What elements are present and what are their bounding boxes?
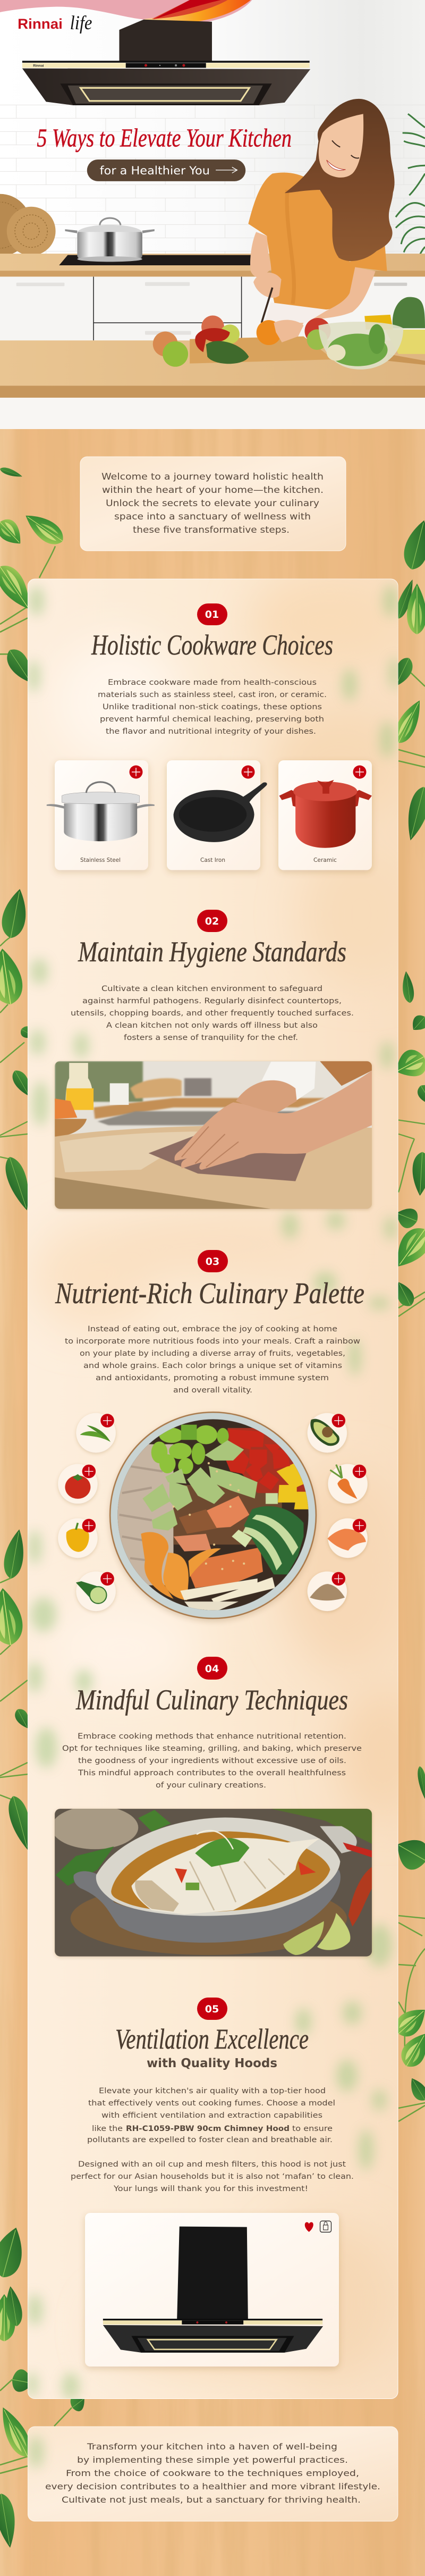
badge 05: 05 bbox=[205, 2003, 219, 2015]
icon: chimney hood bbox=[103, 2227, 323, 2353]
body 02: utensils, chopping boards, and other frequently touched surfaces. bbox=[71, 1009, 354, 1018]
icon: avocado bbox=[308, 1413, 347, 1453]
photo: steamed fish dish bbox=[52, 1806, 372, 1957]
body 05: Your lungs will thank you for this investment! bbox=[113, 2185, 308, 2193]
body 01: Unlike traditional non-stick coatings, these options bbox=[103, 703, 322, 711]
card: ceramic: Ceramic bbox=[313, 857, 337, 863]
hero: kitchen scene bbox=[0, 0, 425, 429]
title: 5 Ways to Elevate Your Kitchen bbox=[37, 123, 292, 153]
subtitle pill with arrow: for a Healthier You bbox=[100, 164, 210, 178]
body 05: Designed with an oil cup and mesh filters, this hood is not just bbox=[78, 2160, 346, 2169]
body 02: against harmful pathogens. Regularly disinfect countertops, bbox=[82, 997, 342, 1005]
body 03: Instead of eating out, embrace the joy of cooking at home bbox=[88, 1325, 337, 1333]
intro text panel: Unlock the secrets to elevate your culinary bbox=[106, 498, 319, 508]
body 02: A clean kitchen not only wards off illness but also bbox=[106, 1021, 318, 1030]
body 03: and whole grains. Each color brings a unique set of vitamins bbox=[83, 1362, 342, 1370]
badge 01: 01 bbox=[205, 609, 219, 620]
card: stainless steel bbox=[47, 760, 155, 870]
body 05: to ensure bbox=[292, 2125, 333, 2133]
body 04: of your culinary creations. bbox=[156, 1781, 266, 1790]
body 04: This mindful approach contributes to the overall healthfulness bbox=[78, 1769, 346, 1777]
card: chimney hood product bbox=[85, 2213, 339, 2367]
icon: heart bbox=[305, 2222, 313, 2232]
subheading: with Quality Hoods bbox=[147, 2057, 277, 2070]
badge 05 bbox=[197, 1998, 227, 2020]
subtitle pill with arrow bbox=[87, 160, 245, 181]
intro text panel bbox=[80, 457, 346, 551]
icon: snap peas bbox=[76, 1413, 116, 1453]
body 01: Embrace cookware made from health-conscious bbox=[108, 678, 317, 687]
body 05: that effectively vents out cooking fumes. Choose a model bbox=[88, 2099, 335, 2108]
body 01 bbox=[98, 678, 327, 736]
card: ceramic bbox=[278, 760, 372, 870]
icon: brown rice grains bbox=[308, 1572, 347, 1611]
body 02: fosters a sense of tranquility for the chef. bbox=[124, 1034, 298, 1042]
palm plant bbox=[396, 114, 425, 263]
body 02 bbox=[71, 985, 354, 1042]
outro text panel bbox=[28, 2427, 398, 2521]
badge 03 bbox=[198, 1250, 228, 1272]
card: stainless steel: Stainless Steel bbox=[80, 857, 121, 863]
body 04 bbox=[62, 1732, 362, 1790]
body 01: prevent harmful chemical leaching, preserving both bbox=[100, 715, 324, 724]
body 03 bbox=[65, 1325, 360, 1395]
photo: hand wiping counter bbox=[55, 1061, 372, 1209]
intro text panel: space into a sanctuary of wellness with bbox=[114, 511, 311, 522]
body 05: like the bbox=[92, 2125, 123, 2133]
intro text panel: these five transformative steps. bbox=[133, 525, 290, 535]
range hood: Rinnai bbox=[33, 64, 44, 68]
icon: salmon bbox=[327, 1518, 368, 1558]
body 02: Cultivate a clean kitchen environment to safeguard bbox=[101, 985, 322, 993]
section 01 bbox=[47, 603, 372, 870]
wicker trivets bbox=[0, 194, 56, 256]
heading 03: Nutrient-Rich Culinary Palette bbox=[55, 1277, 364, 1310]
icon: tomato bbox=[58, 1464, 98, 1504]
outro text panel: every decision contributes to a healthier and more vibrant lifestyle. bbox=[45, 2481, 380, 2491]
body 05: pollutants are expelled to foster clean and breathable air. bbox=[87, 2136, 333, 2144]
poke bowl bbox=[109, 1412, 317, 1621]
heading 05: Ventilation Excellence bbox=[115, 2023, 309, 2055]
body 03: and antioxidants, promoting a robust immune system bbox=[96, 1374, 329, 1382]
vegetables and chopping board bbox=[153, 297, 425, 370]
outro text panel: Cultivate not just meals, but a sanctuary for thriving health. bbox=[62, 2495, 361, 2505]
logo: Rinnai bbox=[18, 16, 63, 32]
top brand wave bbox=[0, 0, 252, 25]
intro text panel: within the heart of your home—the kitchen. bbox=[102, 485, 324, 495]
body 05 bbox=[71, 2087, 354, 2193]
icon: yellow pepper bbox=[58, 1518, 98, 1558]
body 01: materials such as stainless steel, cast iron, or ceramic. bbox=[98, 691, 327, 699]
icon: carrot bbox=[328, 1464, 368, 1504]
body 04: Opt for techniques like steaming, grilling, and baking, which preserve bbox=[62, 1744, 362, 1753]
logo bbox=[18, 12, 92, 33]
icon: shopping bag bbox=[320, 2221, 331, 2232]
cabinets bbox=[0, 276, 425, 342]
icon: red ceramic pot bbox=[279, 780, 372, 848]
body 05: Elevate your kitchen's air quality with a top-tier hood bbox=[99, 2087, 326, 2095]
range hood bbox=[22, 20, 310, 105]
logo: life bbox=[70, 12, 92, 33]
body 04: the goodness of your ingredients without excessive use of oils. bbox=[78, 1757, 346, 1765]
badge 02: 02 bbox=[205, 916, 219, 927]
body 01: the flavor and nutritional integrity of your dishes. bbox=[106, 727, 316, 736]
steel pot bbox=[65, 218, 155, 262]
body 04: Embrace cooking methods that enhance nutritional retention. bbox=[78, 1732, 346, 1741]
outro text panel: Transform your kitchen into a haven of well-being bbox=[87, 2441, 337, 2452]
section 02 bbox=[55, 910, 372, 1209]
badge 01 bbox=[197, 603, 227, 625]
card: cast iron bbox=[167, 760, 267, 870]
main panel bbox=[27, 574, 425, 2400]
body 03: to incorporate more nutritious foods into your meals. Craft a rainbow bbox=[65, 1337, 360, 1346]
outro text panel: by implementing these simple yet powerful practices. bbox=[77, 2455, 348, 2465]
card: cast iron: Cast Iron bbox=[200, 857, 225, 863]
section 04 bbox=[52, 1657, 372, 1957]
badge 02 bbox=[197, 910, 227, 932]
back counter bbox=[0, 254, 425, 276]
cooktop bbox=[59, 255, 253, 265]
kitchen wall bbox=[0, 0, 425, 258]
section 03 bbox=[55, 1250, 368, 1621]
badge 04 bbox=[197, 1657, 227, 1680]
badge 04: 04 bbox=[205, 1663, 219, 1675]
icon: cast iron skillet bbox=[174, 782, 267, 842]
heading 02: Maintain Hygiene Standards bbox=[78, 936, 346, 968]
section 05 bbox=[71, 1998, 354, 2367]
body 03: and overall vitality. bbox=[173, 1386, 252, 1395]
body 05: with efficient ventilation and extraction capabilities bbox=[101, 2111, 322, 2120]
woman cooking bbox=[248, 99, 395, 342]
heading 04: Mindful Culinary Techniques bbox=[75, 1684, 348, 1716]
icon: stainless pot bbox=[47, 782, 155, 841]
intro text panel: Welcome to a journey toward holistic health bbox=[101, 472, 324, 482]
body 05: RH-C1059-PBW 90cm Chimney Hood bbox=[126, 2125, 290, 2133]
icon: cucumber bbox=[76, 1572, 116, 1611]
body 05: perfect for our Asian households but it is also not ‘mafan’ to clean. bbox=[71, 2172, 354, 2181]
badge 03: 03 bbox=[206, 1256, 219, 1268]
outro text panel: From the choice of cookware to the techniques employed, bbox=[66, 2468, 359, 2478]
front counter bbox=[0, 340, 425, 398]
body 03: on your plate by including a diverse array of fruits, vegetables, bbox=[80, 1349, 345, 1358]
heading 01: Holistic Cookware Choices bbox=[91, 629, 333, 661]
